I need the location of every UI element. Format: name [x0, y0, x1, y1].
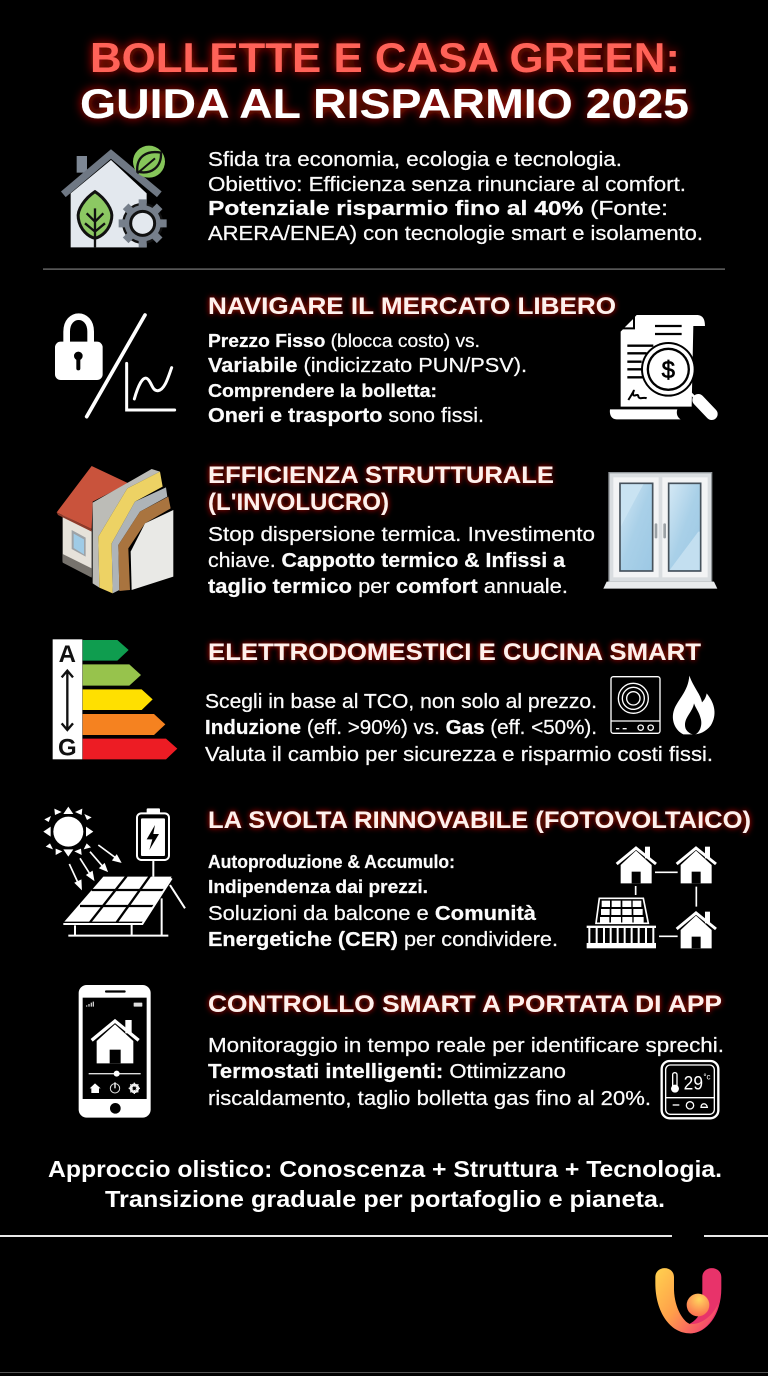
text block: elettrodomestici: Valuta il cambio per sicurezza e risparmio costi fissi. [205, 744, 713, 766]
closing text: Transizione graduale per portafoglio e pianeta. [105, 1186, 665, 1212]
text block: controllo smart [208, 1035, 724, 1110]
icon: smart thermostat [662, 1061, 718, 1118]
icon: padlock versus variable chart [55, 315, 175, 417]
text block: involucro: taglio termico per comfort annuale. [208, 576, 568, 598]
icon: bill under magnifier [610, 315, 712, 419]
closing text: Approccio olistico: Conoscenza + Struttura + Tecnologia. [48, 1156, 722, 1182]
icon: energy label A to G: A [59, 641, 76, 668]
title: GUIDA AL RISPARMIO 2025 [80, 80, 689, 127]
icon: smart thermostat: 29 [684, 1073, 703, 1094]
text block: controllo smart: riscaldamento, taglio bolletta gas fino al 20%. [208, 1088, 651, 1110]
text block: involucro [208, 524, 595, 598]
heading: la svolta rinnovabile: LA SVOLTA RINNOVABILE (FOTOVOLTAICO) [208, 807, 751, 834]
icon: energy label A to G [53, 639, 177, 761]
text block: fotovoltaico: Energetiche (CER) per condividere. [208, 929, 558, 951]
text block: elettrodomestici: Induzione (eff. >90%) vs. Gas (eff. <50%). [205, 717, 597, 739]
intro text: Potenziale risparmio fino al 40% (Fonte: [208, 198, 668, 220]
text block: mercato libero: Variabile (indicizzato PUN/PSV). [208, 355, 527, 377]
icon: energy label A to G: G [58, 734, 77, 761]
heading: efficienza strutturale [208, 462, 554, 516]
intro text: Sfida tra economia, ecologia e tecnologia. [208, 149, 622, 171]
icon: smart thermostat: °c [703, 1072, 711, 1081]
text block: mercato libero: Oneri e trasporto sono fissi. [208, 405, 484, 427]
text block: involucro: Stop dispersione termica. Investimento [208, 524, 595, 546]
logo [655, 1268, 721, 1333]
icon: bill under magnifier: $ [662, 357, 675, 384]
text block: fotovoltaico: Indipendenza dai prezzi. [208, 876, 428, 897]
heading: efficienza strutturale: EFFICIENZA STRUTTURALE [208, 462, 554, 489]
title [80, 34, 689, 127]
text block: elettrodomestici: Scegli in base al TCO, non solo al prezzo. [205, 691, 597, 713]
text block: controllo smart: Termostati intelligenti: Ottimizzano [208, 1061, 566, 1083]
heading: elettrodomestici e cucina smart: ELETTRODOMESTICI E CUCINA SMART [208, 639, 701, 666]
icon: double window [603, 473, 717, 589]
title: BOLLETTE E CASA GREEN: [90, 34, 680, 81]
closing text [48, 1156, 722, 1212]
icon: smartphone with home app [79, 985, 151, 1118]
panel: mercato libero [208, 293, 616, 427]
footer rule [0, 1235, 768, 1373]
text block: fotovoltaico: Soluzioni da balcone e Comunità [208, 903, 537, 925]
panel: efficienza strutturale [208, 462, 595, 598]
icon: house with insulation layers [57, 466, 173, 593]
text block: mercato libero: Comprendere la bolletta: [208, 380, 437, 401]
text block: mercato libero [208, 330, 527, 427]
text block: fotovoltaico: Autoproduzione & Accumulo: [208, 851, 455, 872]
intro text: Obiettivo: Efficienza senza rinunciare al comfort. [208, 174, 686, 196]
text block: mercato libero: Prezzo Fisso (blocca costo) vs. [208, 330, 480, 351]
panel: elettrodomestici [205, 639, 713, 766]
heading: navigare il mercato libero: NAVIGARE IL MERCATO LIBERO [208, 293, 616, 320]
intro text: ARERA/ENEA) con tecnologie smart e isolamento. [208, 223, 703, 245]
icon: induction hob and gas flame [611, 676, 715, 735]
icon: energy community network [587, 847, 716, 948]
text block: involucro: chiave. Cappotto termico & Infissi a [208, 550, 566, 572]
heading: efficienza strutturale: (L'INVOLUCRO) [208, 489, 389, 516]
panel: fotovoltaico [208, 807, 751, 951]
icon: green house with leaf and gear [63, 146, 167, 247]
text block: controllo smart: Monitoraggio in tempo reale per identificare sprechi. [208, 1035, 724, 1057]
text block: fotovoltaico [208, 851, 558, 951]
intro text [208, 149, 703, 245]
panel: controllo smart [208, 991, 724, 1110]
text block: elettrodomestici [205, 691, 713, 766]
icon: sun, solar panel and battery [43, 807, 185, 936]
heading: controllo smart: CONTROLLO SMART A PORTATA DI APP [208, 991, 722, 1018]
